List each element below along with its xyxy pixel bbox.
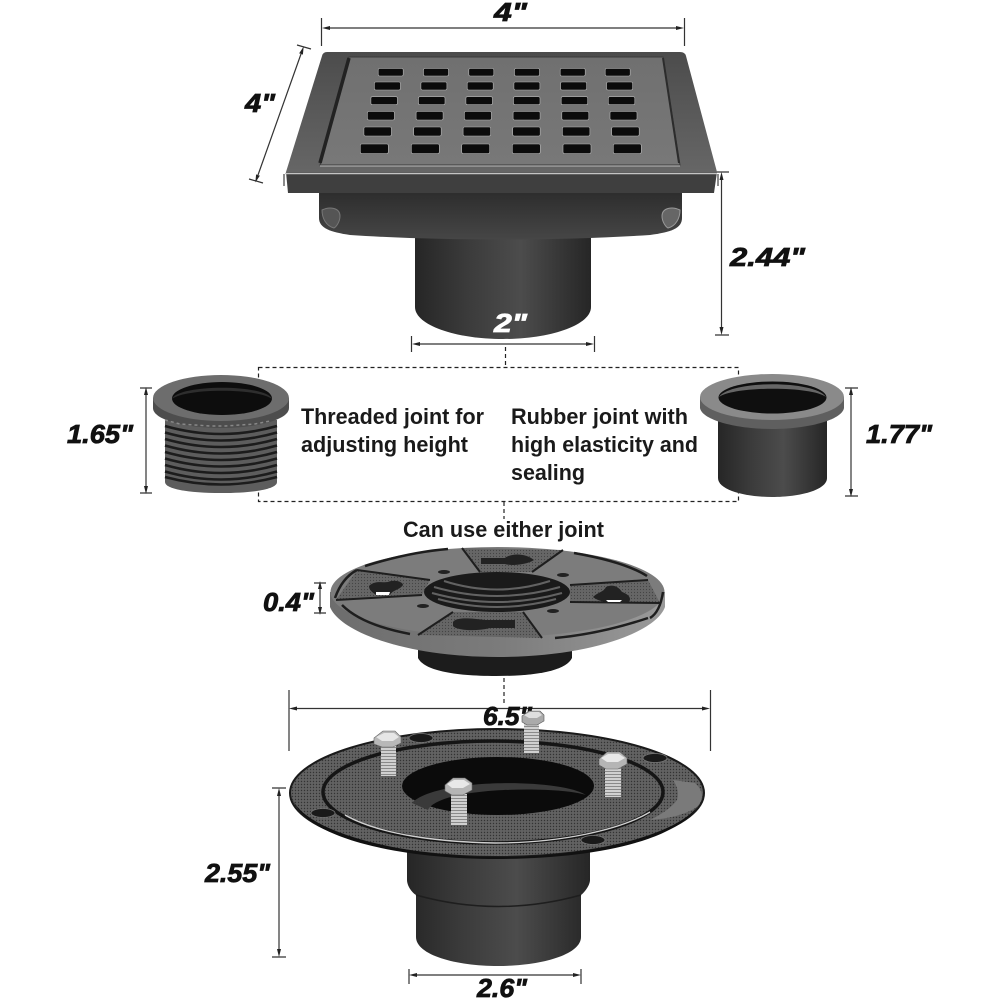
dimension: 2.6 inch [409,969,581,1000]
rubber joint [700,374,844,497]
drain pipe [415,232,591,339]
base flange [290,729,704,859]
label: rubber joint: high elasticity and [511,432,698,457]
dimension: 2.44 inch height [715,172,806,335]
dimension: 2 inch pipe diameter: 2" [493,308,528,338]
dimension: 4 inch width [322,0,684,46]
threaded joint [153,375,289,493]
dimension: 6.5 inch: 6.5" [483,701,533,731]
label: rubber joint: sealing [511,460,585,485]
base pipe [407,845,590,966]
drain body [319,190,682,240]
bolt [599,752,627,797]
dimension: 1.65 inch: 1.65" [67,419,134,449]
dimension: 2.55 inch: 2.55" [204,858,271,888]
dimension: 1.65 inch [67,388,152,493]
label: threaded joint: Threaded joint for [301,404,484,429]
dimension: 2.55 inch [204,788,286,957]
label: either joint: Can use either joint [403,517,605,542]
drain grate with square slots [320,57,680,166]
dimension: 0.4 inch [263,583,326,617]
dimension: 2.44 inch height: 2.44" [729,242,806,272]
dimension: 4 inch depth [244,45,311,183]
dimension: 4 inch depth: 4" [244,88,276,118]
dimension: 6.5 inch [289,678,710,751]
dimension: 1.77 inch [845,388,933,496]
bolt [522,711,544,753]
drain cover square frame [284,52,718,193]
bolt [445,778,472,825]
label: threaded joint: adjusting height [301,432,469,457]
clamping ring [330,547,665,676]
connector dashed line and bracket [258,347,738,519]
bolt [374,731,401,776]
label: rubber joint [511,404,698,485]
dimension: 0.4 inch: 0.4" [263,587,315,617]
label: rubber joint: Rubber joint with [511,404,688,429]
dimension: 2 inch pipe diameter [412,308,594,352]
label: threaded joint [301,404,484,457]
dimension: 1.77 inch: 1.77" [866,419,933,449]
